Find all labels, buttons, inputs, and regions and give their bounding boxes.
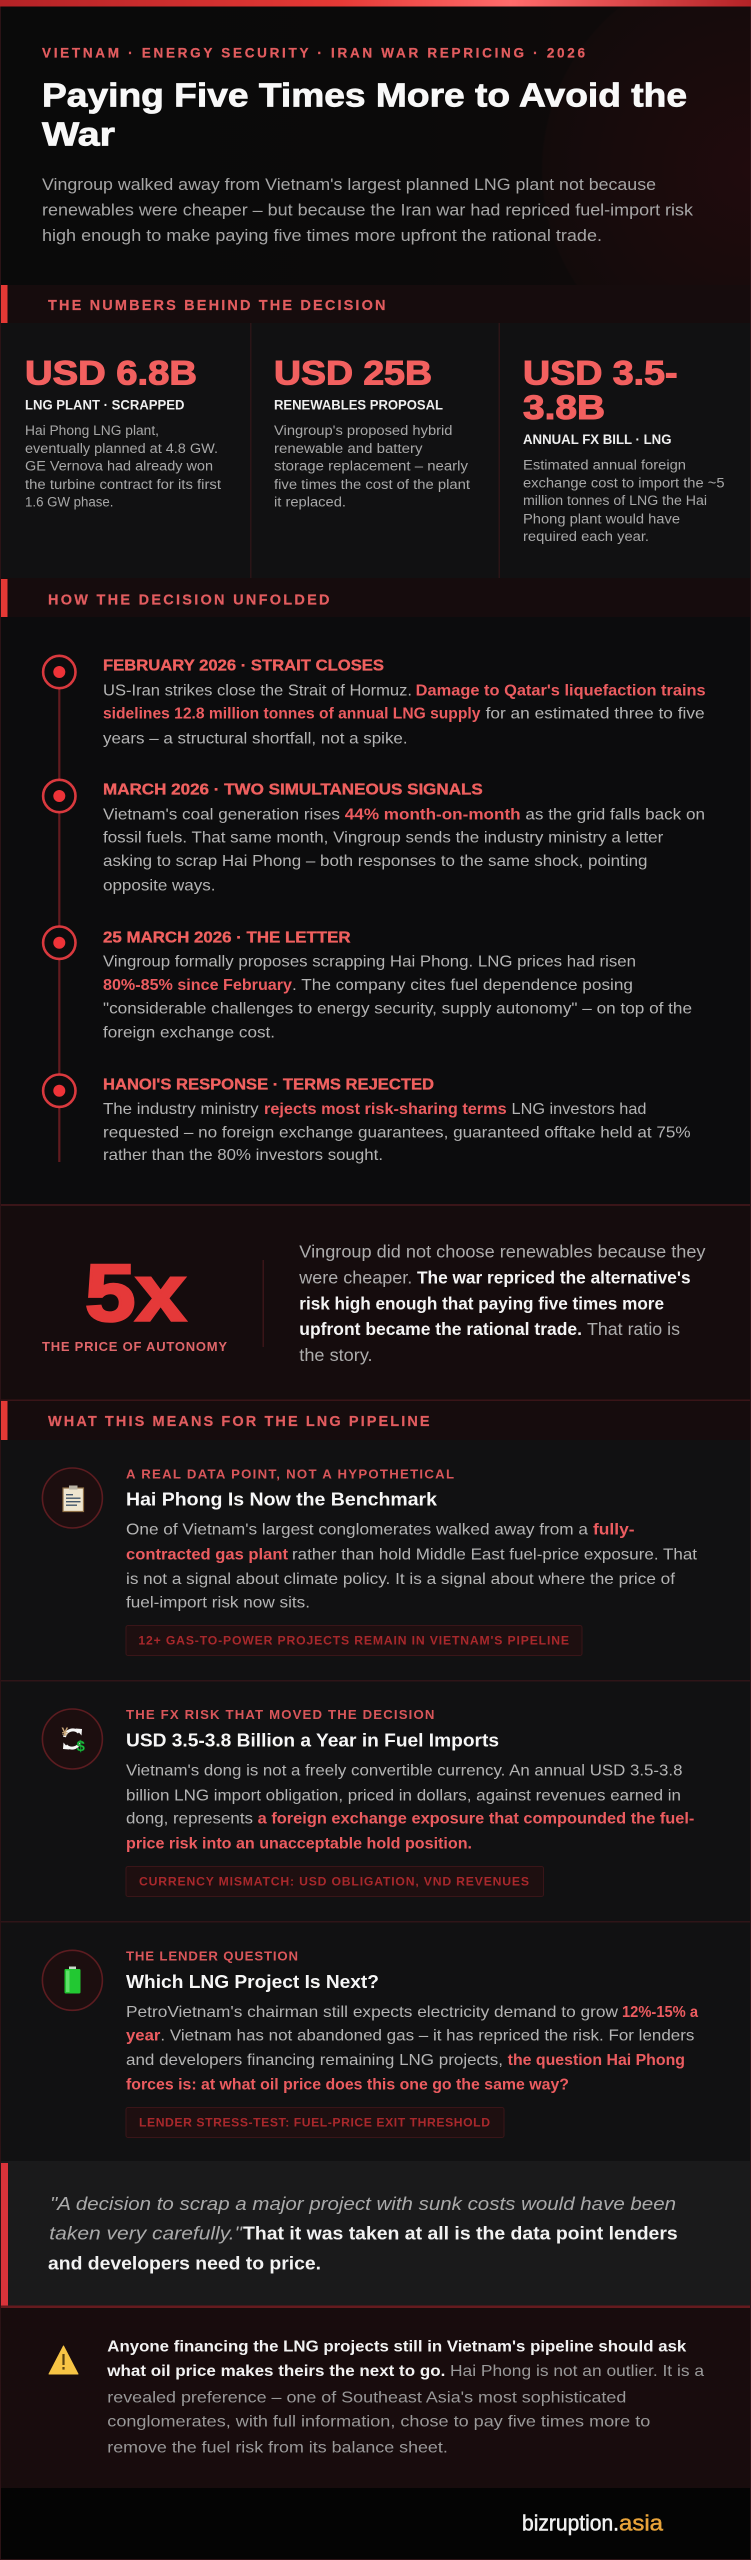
event: Hanoi's response: The industry ministry xyxy=(103,1101,259,1118)
stat: annual FX bill: ANNUAL FX BILL · LNG xyxy=(523,432,672,447)
event: the letter: 25 MARCH 2026 · THE LETTER xyxy=(103,930,351,946)
tag: currency mismatch xyxy=(126,1866,544,1896)
event: strait closes: US-Iran strikes close the Strait of Hormuz. xyxy=(103,682,412,700)
stat: renewables proposal: USD 25B xyxy=(274,354,432,392)
title: War xyxy=(42,116,115,154)
event: the letter xyxy=(43,926,692,1042)
panel: stat cards xyxy=(0,323,751,578)
stat: plant cost: the turbine contract for its first xyxy=(25,477,221,493)
eyebrow: VIETNAM · ENERGY SECURITY · IRAN WAR REPRICING · 2026 xyxy=(42,46,585,60)
stat: annual FX bill: Estimated annual foreign xyxy=(523,458,686,474)
event: Hanoi's response: rejects most risk-sharing terms xyxy=(264,1101,507,1118)
stat: renewables proposal: Vingroup's proposed hybrid xyxy=(274,423,452,439)
event: two signals: 44% month-on-month xyxy=(345,806,521,824)
panel: quote xyxy=(0,2161,751,2308)
event: Hanoi's response xyxy=(43,1074,691,1164)
card: fx risk: Vietnam's dong is not a freely convertible currency. An annual USD 3.5-3.8 xyxy=(126,1762,683,1780)
section heading: numbers: THE NUMBERS BEHIND THE DECISION xyxy=(48,298,386,314)
warning text: Hai Phong is not an outlier. It is a xyxy=(450,2363,704,2380)
footer brand: asia xyxy=(619,2510,664,2536)
warning text: remove the fuel risk from its balance sheet. xyxy=(107,2440,448,2456)
warning text: Anyone financing the LNG projects still in Vietnam's pipeline should ask xyxy=(107,2338,686,2356)
event: Hanoi's response: requested – no foreign exchange guarantees, guaranteed offtake held at 75% xyxy=(103,1124,691,1142)
event: strait closes: sidelines 12.8 million tonnes of annual LNG supply xyxy=(103,706,481,722)
footer brand: bizruption. xyxy=(522,2510,619,2536)
stat: renewables proposal: renewable and battery xyxy=(274,441,423,457)
stat: annual FX bill: USD 3.5- xyxy=(523,354,678,392)
stat: renewables proposal: RENEWABLES PROPOSAL xyxy=(274,398,443,412)
stat: annual FX bill: 3.8B xyxy=(523,389,605,427)
stat: annual FX bill: required each year. xyxy=(523,529,649,545)
stat: renewables proposal: it replaced. xyxy=(274,494,346,510)
warning text: revealed preference – one of Southeast Asia's most sophisticated xyxy=(107,2390,626,2406)
card: fx risk: dong, represents xyxy=(126,1810,253,1828)
section heading: numbers xyxy=(0,285,751,323)
event: strait closes xyxy=(43,656,706,748)
card: fx risk: THE FX RISK THAT MOVED THE DECISION xyxy=(126,1707,434,1722)
event: two signals: MARCH 2026 · TWO SIMULTANEOUS SIGNALS xyxy=(103,782,483,798)
timeline line xyxy=(58,672,60,1162)
panel: header xyxy=(0,0,751,285)
title xyxy=(42,78,687,154)
big number: 5x xyxy=(85,1248,186,1338)
stat: plant cost xyxy=(25,354,221,510)
card: fx risk: USD 3.5-3.8 Billion a Year in Fuel Imports xyxy=(126,1730,499,1750)
card: lender question: 12%-15% a xyxy=(622,2004,698,2021)
tag: lender stress-test xyxy=(126,2108,504,2138)
icon: currency exchange: ¥ xyxy=(62,1725,68,1739)
event: two signals: Vietnam's coal generation rises xyxy=(103,806,340,824)
card: benchmark xyxy=(42,1466,698,1656)
tag: currency mismatch: CURRENCY MISMATCH: USD OBLIGATION, VND REVENUES xyxy=(139,1874,529,1888)
event: Hanoi's response: LNG investors had xyxy=(512,1101,646,1118)
card: lender question: forces is: at what oil price does this one go the same way? xyxy=(126,2076,569,2094)
card: lender question: THE LENDER QUESTION xyxy=(126,1948,298,1964)
card: lender question xyxy=(42,1948,698,2138)
panel: footer xyxy=(0,2488,751,2560)
quote text: That it was taken at all is the data point lenders xyxy=(243,2222,678,2244)
warning text: conglomerates, with full information, chose to pay five times more to xyxy=(107,2414,650,2430)
card: benchmark: is not a signal about climate policy. It is a signal about where the price of xyxy=(126,1571,676,1588)
event: strait closes: years – a structural shortfall, not a spike. xyxy=(103,730,408,748)
section heading: pipeline xyxy=(0,1401,751,1440)
event: two signals: asking to scrap Hai Phong – both responses to the same shock, pointing xyxy=(103,853,648,870)
quote text xyxy=(48,2193,678,2274)
title: Paying Five Times More to Avoid the xyxy=(42,78,687,114)
card: benchmark: rather than hold Middle East fuel-price exposure. That xyxy=(292,1546,698,1564)
stat: plant cost: USD 6.8B xyxy=(25,354,197,392)
event: strait closes: FEBRUARY 2026 · STRAIT CLOSES xyxy=(103,658,384,674)
stat: plant cost: GE Vernova had already won xyxy=(25,458,213,474)
section heading: pipeline: WHAT THIS MEANS FOR THE LNG PIPELINE xyxy=(48,1414,430,1430)
stat: plant cost: Hai Phong LNG plant, xyxy=(25,423,159,439)
stat: renewables proposal xyxy=(274,354,470,510)
quote text: and developers need to price. xyxy=(48,2252,321,2274)
event: the letter: Vingroup formally proposes scrapping Hai Phong. LNG prices had risen xyxy=(103,954,636,970)
icon: clipboard xyxy=(42,1468,102,1528)
stat: plant cost: LNG PLANT · SCRAPPED xyxy=(25,398,185,412)
event: two signals: fossil fuels. That same month, Vingroup sends the industry ministry a letter xyxy=(103,830,663,846)
stat: renewables proposal: five times the cost of the plant xyxy=(274,477,470,493)
quote text: "A decision to scrap a major project with sunk costs would have been xyxy=(50,2193,676,2214)
event: Hanoi's response: HANOI'S RESPONSE · TERMS REJECTED xyxy=(103,1076,434,1094)
card: lender question: year xyxy=(126,2028,160,2044)
stat: annual FX bill xyxy=(523,354,725,545)
event: strait closes: for an estimated three to five xyxy=(486,706,705,722)
card: benchmark: fuel-import risk now sits. xyxy=(126,1594,310,1612)
card: benchmark: Hai Phong Is Now the Benchmark xyxy=(126,1488,438,1510)
callout text: Vingroup did not choose renewables because they xyxy=(299,1242,706,1262)
event: the letter: "considerable challenges to energy security, supply autonomy" – on top of the xyxy=(103,1000,692,1018)
callout text: the story. xyxy=(299,1345,373,1365)
stat: annual FX bill: Phong plant would have xyxy=(523,512,680,528)
callout caption: THE PRICE OF AUTONOMY xyxy=(42,1339,227,1354)
callout text: That ratio is xyxy=(587,1319,680,1339)
top accent bar xyxy=(0,0,751,6)
panel: 5x callout xyxy=(0,1204,751,1402)
card: fx risk: billion LNG import obligation, priced in dollars, against revenues earned in xyxy=(126,1788,681,1804)
callout text xyxy=(298,1242,706,1365)
subtitle xyxy=(42,176,694,245)
icon: currency exchange xyxy=(42,1709,102,1769)
card: benchmark: One of Vietnam's largest conglomerates walked away from a xyxy=(126,1522,588,1538)
callout text: were cheaper. xyxy=(298,1268,412,1288)
subtitle: high enough to make paying five times more upfront the rational trade. xyxy=(42,227,602,245)
event: the letter: foreign exchange cost. xyxy=(103,1024,275,1042)
callout text: The war repriced the alternative's xyxy=(417,1268,691,1288)
event: two signals xyxy=(43,780,705,894)
card: benchmark: contracted gas plant xyxy=(126,1546,289,1564)
quote text: taken very carefully." xyxy=(49,2222,244,2244)
section heading: timeline: HOW THE DECISION UNFOLDED xyxy=(48,592,330,608)
section heading: timeline xyxy=(0,578,751,617)
stat: plant cost: eventually planned at 4.8 GW. xyxy=(25,441,218,457)
card: benchmark: A REAL DATA POINT, NOT A HYPOTHETICAL xyxy=(126,1466,454,1482)
panel: timeline xyxy=(0,617,751,1204)
event: strait closes: Damage to Qatar's liquefaction trains xyxy=(416,682,706,700)
card: lender question: the question Hai Phong xyxy=(508,2052,685,2069)
callout text: risk high enough that paying five times more xyxy=(299,1294,664,1314)
event: two signals: opposite ways. xyxy=(103,878,216,894)
card: fx risk: price risk into an unacceptable hold position. xyxy=(126,1836,472,1852)
icon: currency exchange: $ xyxy=(76,1738,86,1755)
panel: pipeline cards xyxy=(0,1440,751,2161)
warning text xyxy=(106,2338,704,2456)
tag: pipeline count xyxy=(126,1626,582,1656)
panel: warning xyxy=(0,2308,751,2488)
card: fx risk xyxy=(42,1707,694,1896)
event: the letter: . The company cites fuel dependence posing xyxy=(292,977,633,994)
card: lender question: and developers financing remaining LNG projects, xyxy=(126,2052,503,2069)
card: benchmark: fully- xyxy=(593,1522,635,1538)
event: the letter: 80%-85% since February xyxy=(103,977,292,994)
icon: warning triangle xyxy=(49,2346,78,2374)
stat: annual FX bill: exchange cost to import the ~5 xyxy=(523,476,725,492)
stat: plant cost: 1.6 GW phase. xyxy=(25,494,114,510)
card: lender question: . Vietnam has not abandoned gas – it has repriced the risk. For lenders xyxy=(160,2028,694,2044)
callout text: upfront became the rational trade. xyxy=(299,1319,582,1339)
subtitle: renewables were cheaper – but because the Iran war had repriced fuel-import risk xyxy=(42,202,694,220)
event: Hanoi's response: rather than the 80% investors sought. xyxy=(103,1147,383,1164)
stat: annual FX bill: million tonnes of LNG the Hai xyxy=(523,493,707,509)
card: lender question: PetroVietnam's chairman still expects electricity demand to grow xyxy=(126,2004,619,2021)
event: two signals: as the grid falls back on xyxy=(525,806,705,824)
card: fx risk: a foreign exchange exposure that compounded the fuel- xyxy=(258,1810,694,1828)
tag: lender stress-test: LENDER STRESS-TEST: FUEL-PRICE EXIT THRESHOLD xyxy=(139,2116,490,2130)
subtitle: Vingroup walked away from Vietnam's largest planned LNG plant not because xyxy=(42,176,656,194)
card: lender question: Which LNG Project Is Next? xyxy=(126,1971,379,1992)
warning text: what oil price makes theirs the next to go. xyxy=(106,2363,445,2380)
tag: pipeline count: 12+ GAS-TO-POWER PROJECTS REMAIN IN VIETNAM'S PIPELINE xyxy=(138,1634,569,1648)
icon: battery xyxy=(42,1950,102,2010)
stat: renewables proposal: storage replacement – nearly xyxy=(274,458,469,474)
